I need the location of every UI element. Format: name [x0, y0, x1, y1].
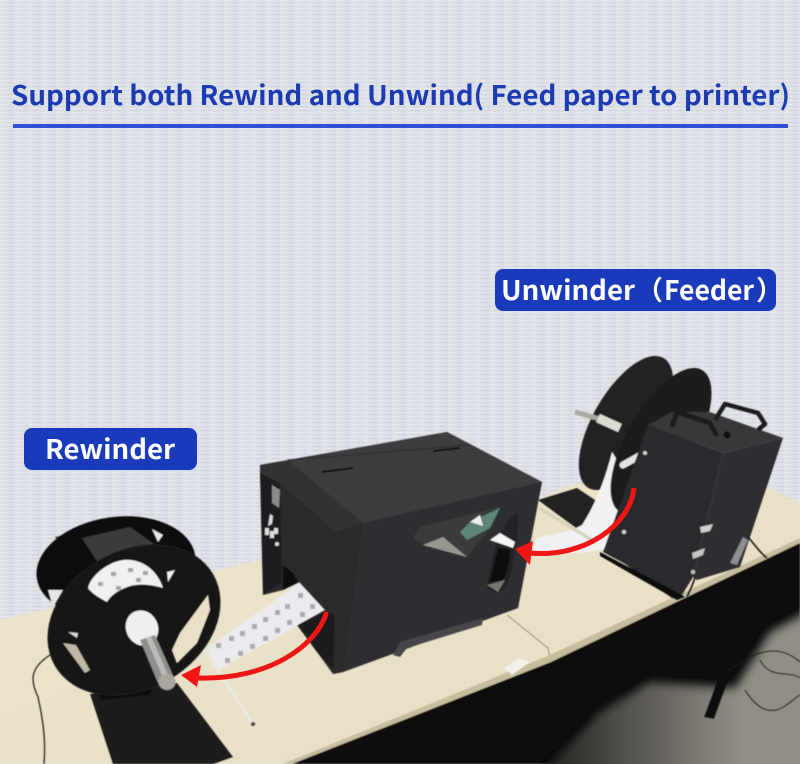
slot	[487, 513, 518, 592]
side ports	[700, 524, 713, 533]
printer control strip	[260, 473, 282, 595]
handles	[715, 404, 765, 430]
arrow: feeder to printer	[515, 488, 634, 565]
rewinder	[21, 506, 255, 764]
title underline	[13, 124, 788, 128]
label roll	[88, 560, 163, 602]
rod	[205, 650, 253, 724]
box side	[693, 438, 783, 580]
flange slot	[623, 456, 639, 465]
bottom handle	[393, 618, 483, 657]
label: Unwinder (Feeder): Unwinder	[501, 269, 635, 308]
base plate	[90, 683, 233, 764]
printer side	[343, 482, 542, 672]
scene: desk and floor	[0, 483, 800, 764]
box top	[648, 412, 783, 453]
unwinder	[531, 342, 783, 600]
spindle	[575, 412, 620, 428]
shaft hub	[120, 605, 164, 651]
box front	[603, 425, 723, 595]
top seam and slits	[288, 445, 470, 460]
label: Unwinder (Feeder): Feeder	[664, 269, 754, 308]
label: Unwinder (Feeder): ）	[756, 269, 783, 308]
paper entering printer	[490, 533, 515, 548]
label: Rewinder: Rewinder	[45, 428, 175, 467]
window	[413, 507, 500, 557]
rear housing tab	[55, 533, 73, 552]
cables	[687, 537, 767, 597]
front flange	[21, 515, 247, 725]
printer	[260, 432, 542, 674]
back flange	[30, 506, 202, 628]
base plate	[538, 488, 682, 598]
front flange	[591, 353, 731, 529]
feeder box	[600, 404, 783, 600]
label: Unwinder (Feeder): （	[636, 269, 663, 308]
printer silhouette	[260, 432, 542, 674]
back flange	[560, 342, 692, 504]
shaft	[140, 635, 176, 690]
printer top	[288, 432, 542, 532]
label: Rewinder	[24, 428, 197, 470]
cable	[33, 655, 50, 764]
arrow: label strip to rewinder	[181, 614, 326, 687]
printer lid band	[260, 460, 363, 532]
printer front cover	[280, 483, 335, 614]
paper web	[531, 452, 630, 553]
display and keypad	[272, 485, 280, 508]
guide rod	[539, 508, 592, 540]
title: Support both Rewind and Unwind( Feed paper to printer)	[11, 74, 790, 113]
printer front pillar	[333, 523, 363, 674]
label strip	[208, 583, 325, 670]
label: Unwinder (Feeder)	[495, 269, 783, 311]
